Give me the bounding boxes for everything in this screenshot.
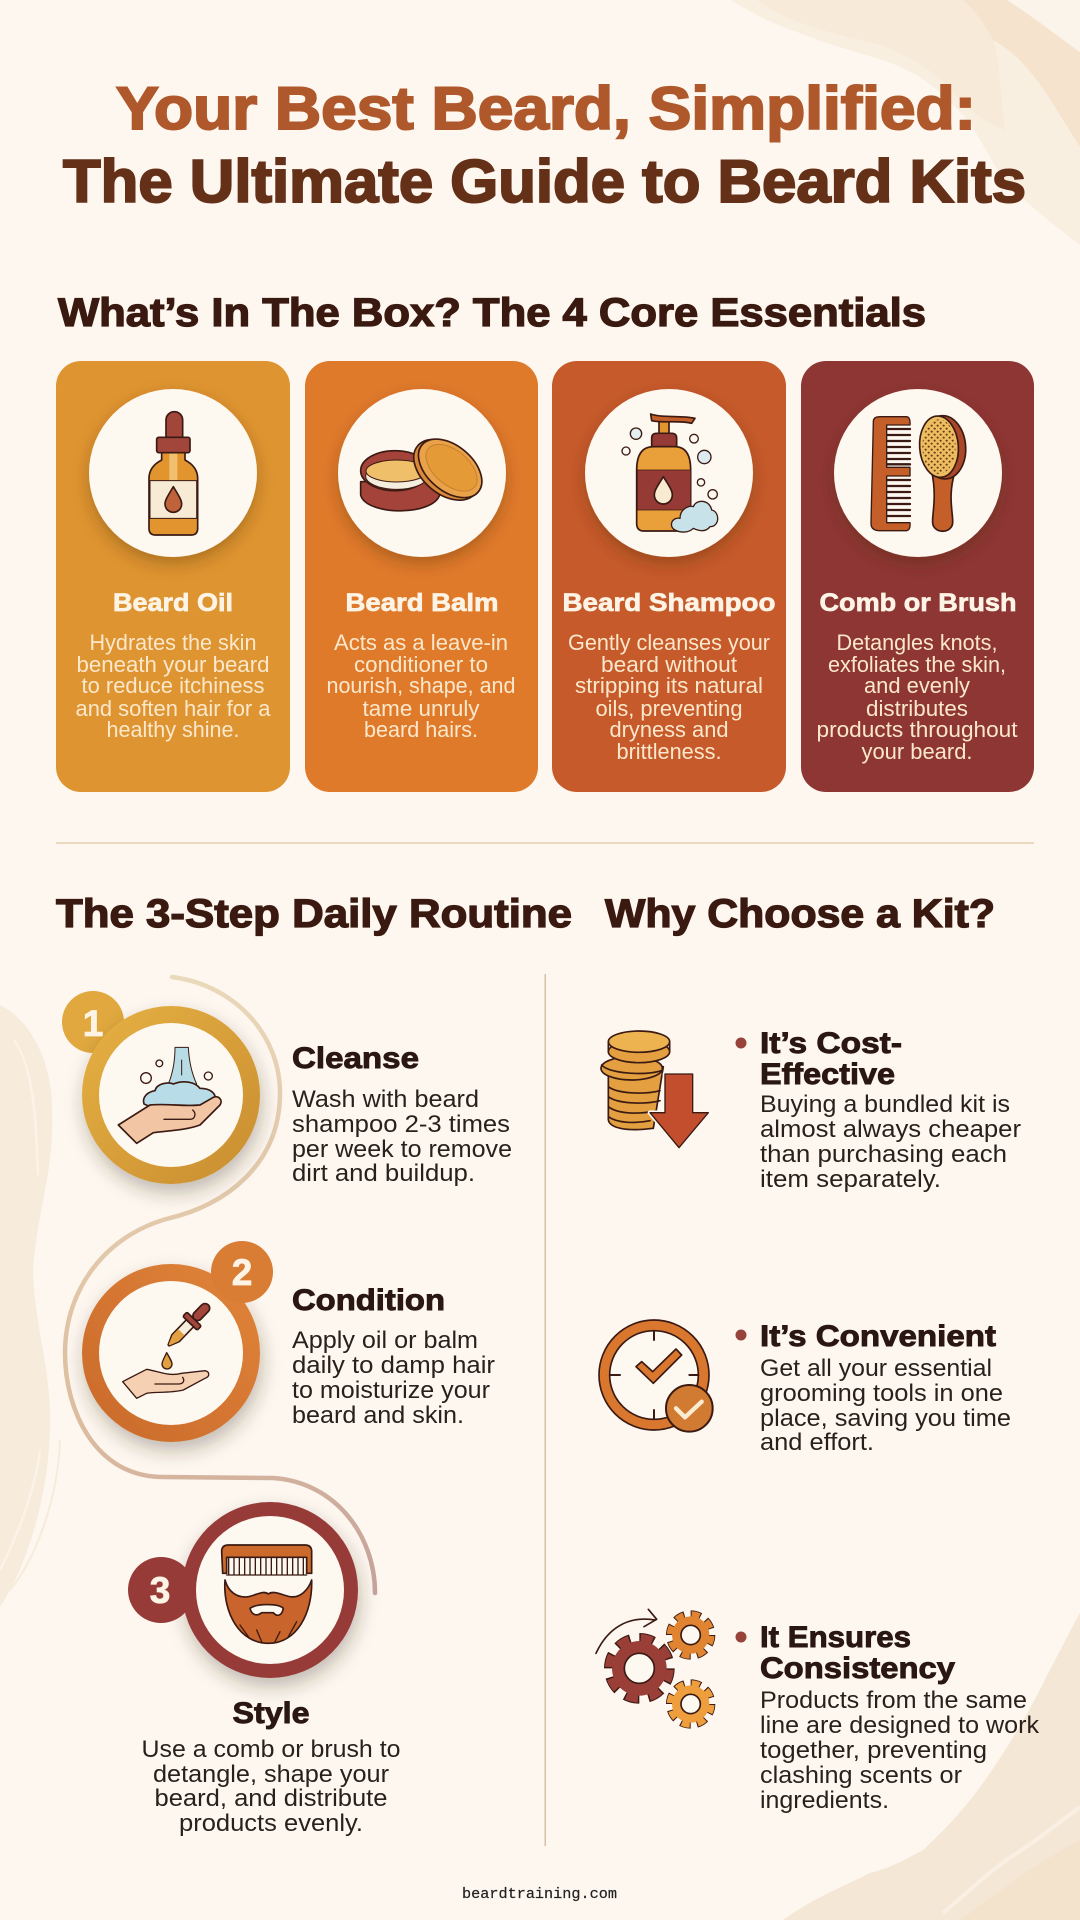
step 3 text: beard, and distribute <box>154 1785 388 1812</box>
card text: stripping its natural <box>575 673 763 698</box>
benefit text: grooming tools in one <box>760 1380 1003 1407</box>
card text: Acts as a leave-in <box>334 630 508 655</box>
step 2 text: Apply oil or balm <box>292 1327 478 1354</box>
benefit text: than purchasing each <box>760 1141 1007 1168</box>
benefit text: line are designed to work <box>760 1712 1040 1739</box>
benefit text <box>760 1091 1021 1193</box>
benefit text <box>760 1687 1040 1814</box>
card title: Comb or Brush <box>820 589 1016 617</box>
icon: clock with check <box>599 1320 713 1432</box>
step 1 text: Wash with beard <box>292 1086 479 1113</box>
card text <box>76 630 271 742</box>
icon: shampoo bottle <box>622 414 718 532</box>
card text: Hydrates the skin <box>90 630 256 655</box>
card text: dryness and <box>610 717 728 742</box>
step 1 text <box>292 1086 512 1187</box>
step 3 text: detangle, shape your <box>153 1761 389 1788</box>
icon: comb and brush <box>871 414 968 531</box>
card text <box>816 630 1018 764</box>
step 3 text: Use a comb or brush to <box>142 1736 400 1763</box>
card text: Detangles knots, <box>836 630 998 655</box>
card text: distributes <box>866 696 968 721</box>
step 3 text: products evenly. <box>179 1810 363 1837</box>
benefit text: Buying a bundled kit is <box>760 1091 1010 1118</box>
benefit text: clashing scents or <box>760 1762 962 1789</box>
card text: beard hairs. <box>364 717 478 742</box>
step 1 title: Cleanse <box>292 1042 419 1075</box>
benefit title: It’s Convenient <box>760 1320 996 1353</box>
card text: beard without <box>601 652 737 677</box>
step 1: cleanse <box>62 991 512 1187</box>
card text: and evenly <box>864 673 970 698</box>
step 3 title: Style <box>232 1697 310 1730</box>
icon: comb and beard <box>222 1545 312 1643</box>
card text <box>568 630 770 764</box>
card text: exfoliates the skin, <box>828 652 1006 677</box>
card text: brittleness. <box>616 739 722 764</box>
icon: balm tin <box>361 426 493 513</box>
benefit title: It’s Cost- <box>760 1027 902 1060</box>
benefit title <box>760 1027 902 1091</box>
benefit title: Consistency <box>760 1652 955 1685</box>
card text: Gently cleanses your <box>568 630 770 655</box>
step 1 badge: 1 <box>83 1003 103 1044</box>
card text: products throughout <box>816 717 1018 742</box>
card text: nourish, shape, and <box>326 673 516 698</box>
step 3 badge <box>128 1502 358 1678</box>
step 2 badge: 2 <box>232 1252 252 1293</box>
panel: beard oil card <box>56 361 290 792</box>
benefit text: almost always cheaper <box>760 1116 1021 1143</box>
step 3 text <box>142 1736 400 1837</box>
card text: beneath your beard <box>76 652 270 677</box>
benefit title <box>760 1621 955 1685</box>
benefit text: item separately. <box>760 1166 941 1193</box>
benefit text: Products from the same <box>760 1687 1027 1714</box>
card text: conditioner to <box>354 652 488 677</box>
icon: washing hand <box>118 1047 221 1143</box>
icon: gears <box>596 1609 711 1724</box>
step 3: style <box>128 1502 400 1837</box>
benefit text: together, preventing <box>760 1737 987 1764</box>
card text: oils, preventing <box>596 696 742 721</box>
benefit: convenient <box>599 1320 1011 1456</box>
panel: beard balm card <box>305 361 538 792</box>
title <box>63 75 1026 215</box>
panel: comb or brush card <box>801 361 1034 792</box>
benefit text: and effort. <box>760 1429 874 1456</box>
heading: core essentials: What’s In The Box? The 4 Core Essentials <box>58 291 926 335</box>
benefit title: It Ensures <box>760 1621 911 1654</box>
step 2 text <box>292 1327 495 1429</box>
card title: Beard Balm <box>346 589 498 617</box>
bullet <box>736 1038 746 1048</box>
brush stroke: left <box>0 1005 60 1607</box>
step 2 badge <box>82 1241 273 1442</box>
step 1 text: dirt and buildup. <box>292 1160 475 1187</box>
step 3 badge: 3 <box>150 1570 170 1611</box>
card text: and soften hair for a <box>76 696 271 721</box>
card text: healthy shine. <box>106 717 240 742</box>
title: Your Best Beard, Simplified: <box>116 75 976 142</box>
step 2 text: daily to damp hair <box>292 1352 495 1379</box>
step 2: condition <box>82 1241 495 1442</box>
step 2 text: to moisturize your <box>292 1377 490 1404</box>
card title: Beard Oil <box>113 589 233 617</box>
brush stroke: bottom right <box>783 1613 1080 1920</box>
connector path <box>65 977 375 1593</box>
benefit: cost-effective <box>601 1027 1021 1193</box>
benefit text: place, saving you time <box>760 1405 1011 1432</box>
footer: beardtraining.com <box>462 1885 617 1903</box>
step 2 text: beard and skin. <box>292 1402 464 1429</box>
bullet <box>736 1330 746 1340</box>
benefit: consistency <box>596 1609 1040 1814</box>
heading: why choose a kit: Why Choose a Kit? <box>605 892 995 936</box>
card text: your beard. <box>862 739 972 764</box>
card text: to reduce itchiness <box>82 673 264 698</box>
step 1 text: per week to remove <box>292 1136 512 1163</box>
panel: beard shampoo card <box>552 361 786 792</box>
bullet <box>736 1632 746 1642</box>
brush stroke: top right <box>730 0 1080 245</box>
benefit text <box>760 1355 1011 1456</box>
icon: coins and down arrow <box>601 1031 708 1148</box>
benefit text: ingredients. <box>760 1787 889 1814</box>
step 1 text: shampoo 2-3 times <box>292 1111 510 1138</box>
icon: dropper over hand <box>123 1298 215 1398</box>
icon: oil bottle <box>149 412 198 535</box>
title: The Ultimate Guide to Beard Kits <box>63 148 1026 215</box>
step 2 title: Condition <box>292 1284 445 1317</box>
heading: daily routine: The 3-Step Daily Routine <box>56 892 572 936</box>
card text: tame unruly <box>362 696 480 721</box>
benefit title: Effective <box>760 1058 895 1091</box>
card title: Beard Shampoo <box>562 589 776 617</box>
step 1 badge <box>62 991 260 1184</box>
benefit text: Get all your essential <box>760 1355 992 1382</box>
card text <box>326 630 516 742</box>
